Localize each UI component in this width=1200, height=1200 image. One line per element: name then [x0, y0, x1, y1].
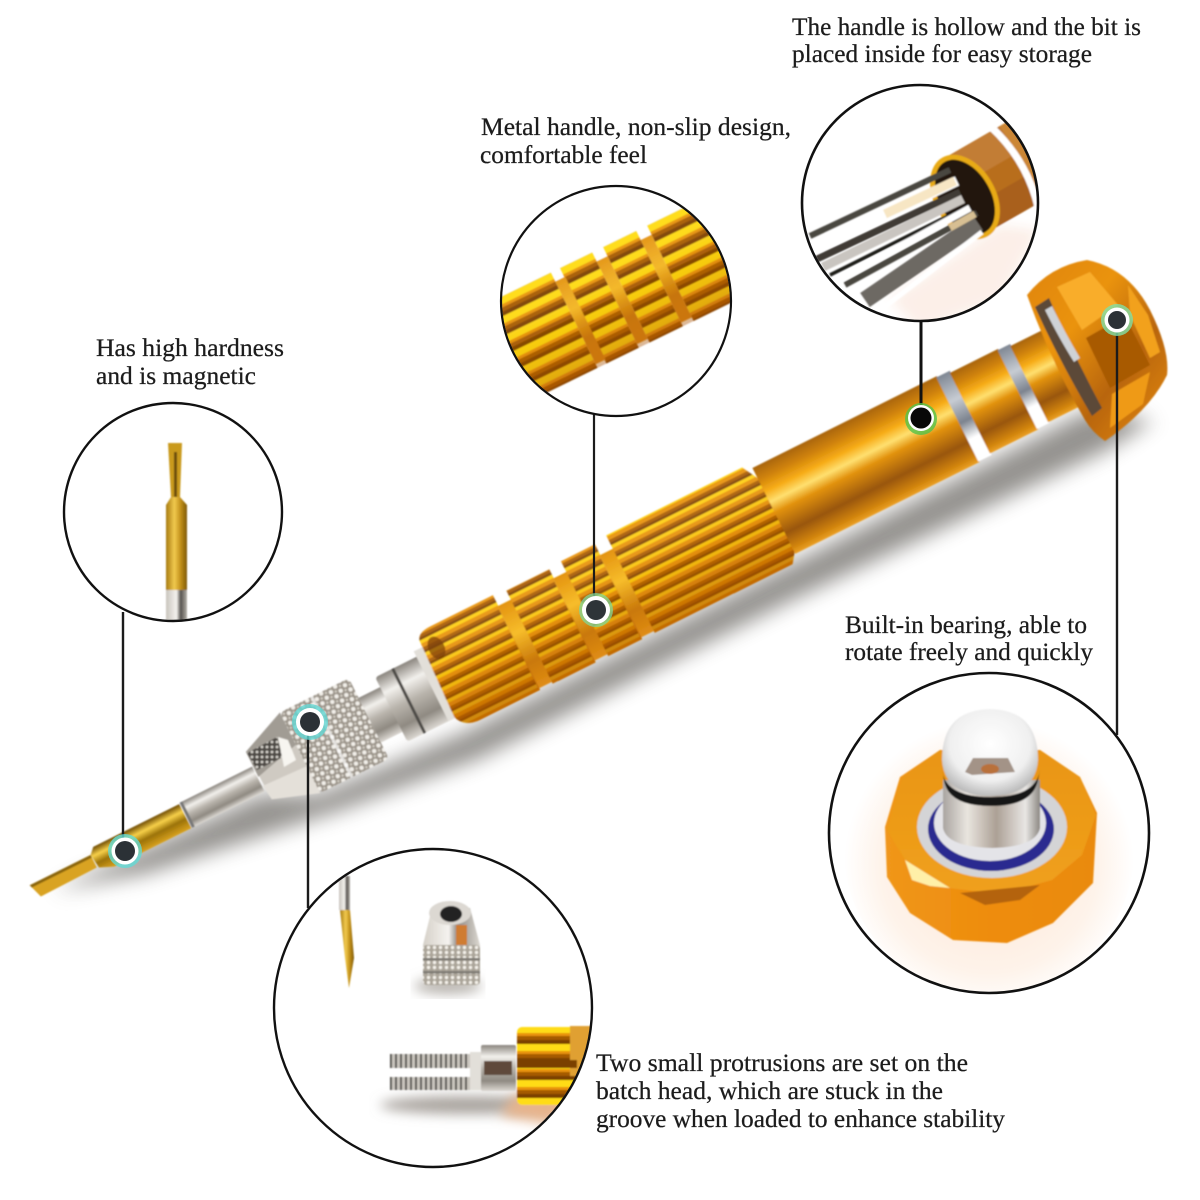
- loose bit: [339, 876, 354, 988]
- open handle with stored bits: [808, 122, 1036, 320]
- shadow under screwdriver: [53, 357, 1156, 959]
- callout line: grip: [593, 414, 595, 603]
- text: protrusions: Two small protrusions are set on the: [596, 1050, 968, 1077]
- handle end with slotted screw: [380, 1026, 592, 1125]
- text: hardness: Has high hardness: [96, 335, 284, 362]
- text: bearing: [845, 612, 1093, 666]
- text: hollow handle: [792, 14, 1141, 68]
- bit illustration: [166, 443, 187, 624]
- marker dot: grip: [579, 593, 613, 627]
- text: hardness: [96, 335, 284, 390]
- text: protrusions: batch head, which are stuck in the: [596, 1078, 943, 1105]
- dark chuck window: [247, 737, 283, 770]
- screwdriver: [27, 260, 1167, 904]
- text: protrusions: groove when loaded to enhance stability: [596, 1106, 1005, 1133]
- marker dot: chuck: [292, 704, 328, 740]
- screwdriver tip and shank: [27, 767, 265, 904]
- text: hardness: and is magnetic: [96, 363, 256, 390]
- text: hollow handle: placed inside for easy storage: [792, 41, 1092, 68]
- knob head with bearing: [1027, 260, 1167, 441]
- smooth handle barrel: [752, 319, 1095, 554]
- marker dot: bit: [108, 834, 142, 868]
- text: metal handle: comfortable feel: [480, 142, 647, 169]
- panel: bearing detail: [829, 673, 1149, 995]
- text: bearing: Built-in bearing, able to: [845, 612, 1087, 639]
- chuck highlight: [278, 737, 296, 767]
- panel: bit detail: [64, 403, 282, 624]
- callout line: hollow handle: [920, 320, 922, 412]
- loose chuck nut: [414, 901, 482, 994]
- marker dot: hollow handle: [905, 403, 937, 435]
- panel: grip detail: [466, 186, 766, 416]
- text: metal handle: [480, 114, 791, 169]
- callout line: bearing: [1116, 325, 1118, 735]
- text: bearing: rotate freely and quickly: [845, 639, 1093, 666]
- text: hollow handle: The handle is hollow and the bit is: [792, 14, 1141, 41]
- knurled metal grip: [412, 463, 800, 730]
- panel: disassembled parts detail: [274, 849, 592, 1167]
- text: protrusions: [596, 1050, 1005, 1133]
- grip close-up: [502, 208, 730, 393]
- callout line: chuck: [307, 730, 309, 908]
- marker dot: bearing: [1101, 304, 1133, 336]
- silver collar: [351, 647, 457, 752]
- text: metal handle: Metal handle, non-slip design,: [481, 114, 791, 141]
- callout line: bit: [122, 612, 124, 845]
- knurled chuck: [280, 678, 389, 793]
- bearing knob close-up: [858, 709, 1120, 992]
- silver chuck cone: [237, 713, 320, 814]
- panel: hollow handle detail: [802, 85, 1106, 330]
